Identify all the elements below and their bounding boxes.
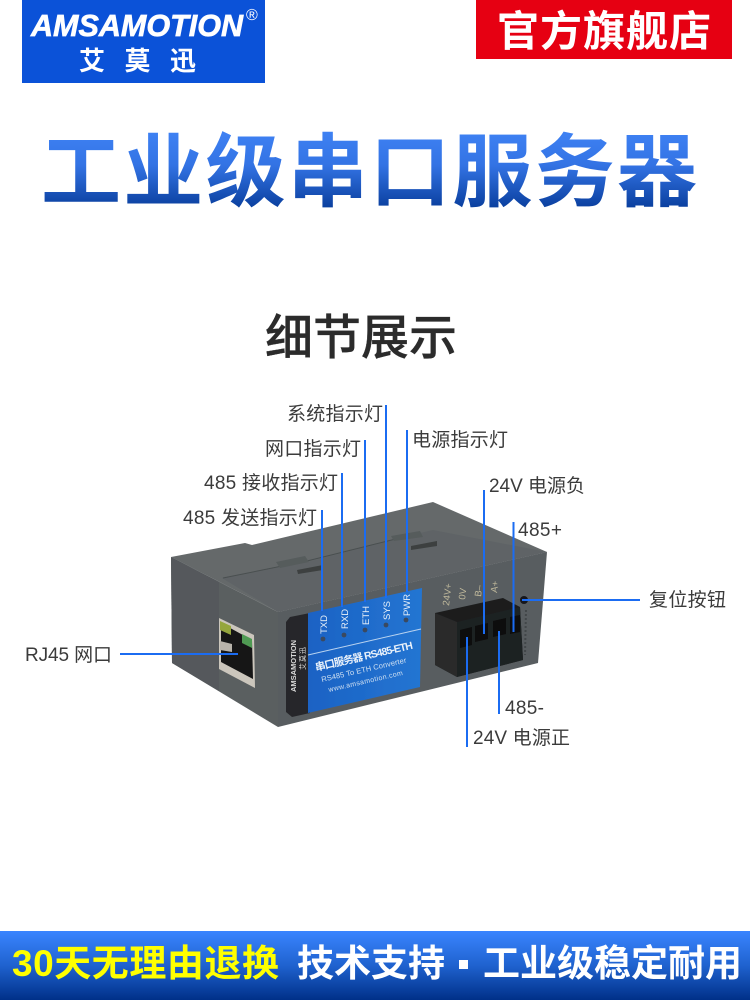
black side label: AMSAMOTION — [289, 640, 298, 692]
product: serial server device — [171, 502, 547, 727]
label: 24V negative: 24V 电源负 — [489, 475, 585, 497]
indicator labels: PWR — [402, 594, 413, 616]
support text: 技术支持 — [297, 943, 445, 984]
label: 485 send indicator: 485 发送指示灯 — [183, 507, 317, 529]
logo wordmark: AMSAMOTION — [30, 8, 244, 43]
returns promise: 30天无理由退换 — [12, 943, 279, 984]
black side label: 艾莫迅 — [298, 647, 307, 670]
label: 24V positive: 24V 电源正 — [473, 727, 570, 749]
logo registered mark: ® — [246, 7, 258, 24]
port silkscreen labels: 0V — [457, 587, 469, 600]
section heading: 细节展示 — [265, 312, 457, 365]
label: RJ45: RJ45 网口 — [25, 645, 112, 666]
label product name: 串口服务器 RS485-ETH — [314, 639, 414, 674]
black side label — [286, 613, 310, 717]
label: reset button: 复位按钮 — [649, 589, 726, 611]
indicator labels: RXD — [340, 609, 351, 629]
indicator labels — [319, 594, 413, 634]
indicator labels: TXD — [319, 615, 330, 634]
title: 工业级串口服务器 — [41, 128, 697, 217]
durability text: 工业级稳定耐用 — [483, 943, 742, 984]
port silkscreen labels — [441, 580, 501, 606]
label: 485 receive indicator: 485 接收指示灯 — [204, 472, 338, 494]
blue product label — [308, 588, 422, 713]
port silkscreen labels: B– — [473, 584, 485, 597]
callout leader lines — [120, 405, 640, 747]
port silkscreen labels: 24V+ — [441, 582, 455, 606]
indicator labels: SYS — [382, 601, 393, 620]
device left face — [171, 557, 278, 727]
label subtitle: RS485 To ETH Converter — [320, 655, 408, 684]
flagship store badge: 官方旗舰店 — [497, 8, 711, 55]
logo panel — [22, 0, 265, 83]
device front face — [278, 552, 547, 727]
terminal block connector — [435, 598, 526, 677]
callout labels — [25, 403, 726, 749]
indicator lights — [321, 618, 408, 641]
label: network indicator: 网口指示灯 — [265, 438, 361, 460]
label: 485 plus: 485+ — [518, 520, 562, 541]
label: power indicator: 电源指示灯 — [412, 429, 508, 451]
bottom banner — [0, 931, 750, 1000]
label: 485 minus: 485- — [505, 698, 544, 719]
reset button hole — [520, 596, 528, 604]
separator dot — [459, 960, 468, 969]
device top face — [171, 502, 547, 612]
label: system indicator: 系统指示灯 — [287, 403, 383, 425]
logo chinese name: 艾莫迅 — [79, 46, 196, 76]
indicator labels: ETH — [361, 606, 372, 625]
label website: www.amsamotion.com — [327, 670, 404, 694]
port silkscreen labels: A+ — [489, 580, 501, 593]
flagship store badge — [476, 0, 732, 59]
RJ45 port — [219, 618, 255, 688]
